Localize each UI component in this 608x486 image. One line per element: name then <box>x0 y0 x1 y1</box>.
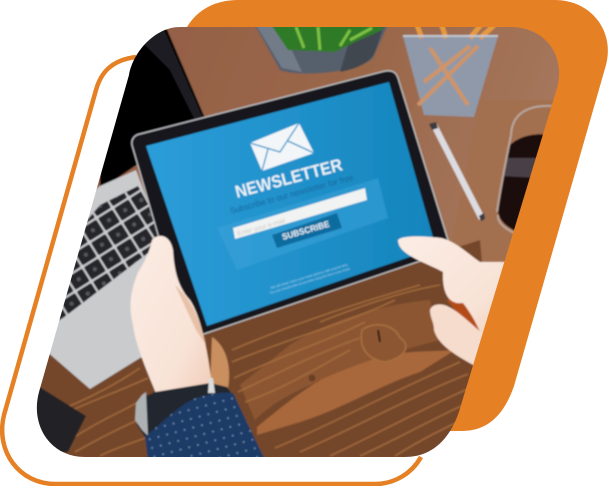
subscribe button <box>272 213 342 248</box>
left hand and sleeve <box>131 236 265 460</box>
email input: Enter your e-mail <box>237 217 287 238</box>
laptop base <box>50 169 150 390</box>
email input <box>233 188 367 239</box>
plant leaves <box>272 27 383 52</box>
sleeve <box>145 393 265 460</box>
photo: newsletter on a tablet <box>36 27 560 457</box>
tablet <box>132 71 448 337</box>
right hand <box>398 236 510 375</box>
orange backing shape <box>187 0 608 431</box>
pen <box>429 122 485 221</box>
fine print: You can unsubscribe at any time using the link in any email. <box>269 266 351 295</box>
newsletter heading: NEWSLETTER <box>233 154 345 202</box>
fine print: We will never share your email address with anyone else. <box>270 262 349 290</box>
phone <box>36 387 86 453</box>
wood knot <box>361 325 406 362</box>
subscribe tagline: Subscribe to our newsletter for free. <box>229 172 357 216</box>
subscribe button: SUBSCRIBE <box>281 219 331 242</box>
laptop keyboard <box>59 186 158 322</box>
plant pot <box>255 27 388 74</box>
watch <box>137 383 232 437</box>
coffee glass <box>497 106 552 240</box>
laptop screen <box>99 29 205 186</box>
lower wood tone areas <box>257 350 455 435</box>
envelope icon <box>250 123 314 171</box>
wooden desk <box>40 27 560 457</box>
orange outline shape <box>2 57 421 484</box>
pencil cup <box>403 20 500 117</box>
tablet screen <box>146 82 436 326</box>
signup panel <box>217 178 388 270</box>
